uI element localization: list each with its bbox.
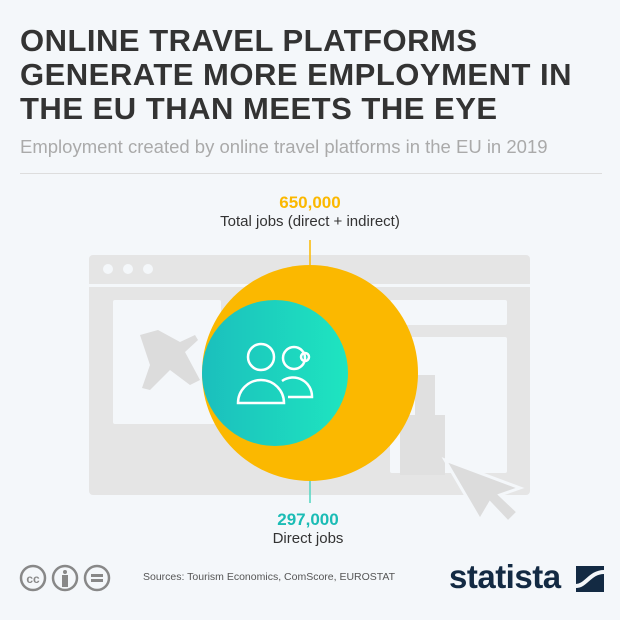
circle: total jobs bbox=[202, 265, 418, 481]
label: direct jobs bbox=[273, 510, 343, 547]
icons: creative commons bbox=[20, 564, 110, 592]
circle: direct jobs bbox=[202, 300, 348, 446]
label: direct jobs: Direct jobs bbox=[273, 530, 343, 547]
connector lines bbox=[309, 240, 311, 265]
icons: creative commons: cc bbox=[26, 572, 40, 586]
label: direct jobs: 297,000 bbox=[277, 510, 339, 529]
sources: Sources: Tourism Economics, ComScore, EUROSTAT bbox=[143, 571, 395, 583]
icon: people bbox=[238, 344, 312, 403]
label: total jobs bbox=[220, 193, 400, 230]
label: total jobs: 650,000 bbox=[279, 193, 341, 212]
title bbox=[20, 23, 572, 126]
subtitle: Employment created by online travel platforms in the EU in 2019 bbox=[20, 136, 548, 157]
label: total jobs: Total jobs (direct + indirect) bbox=[220, 213, 400, 230]
title: THE EU THAN MEETS THE EYE bbox=[20, 91, 498, 126]
logo: statista: statista bbox=[449, 558, 561, 595]
title: ONLINE TRAVEL PLATFORMS bbox=[20, 23, 478, 58]
browser background illustration bbox=[89, 255, 530, 522]
title: GENERATE MORE EMPLOYMENT IN bbox=[20, 57, 572, 92]
